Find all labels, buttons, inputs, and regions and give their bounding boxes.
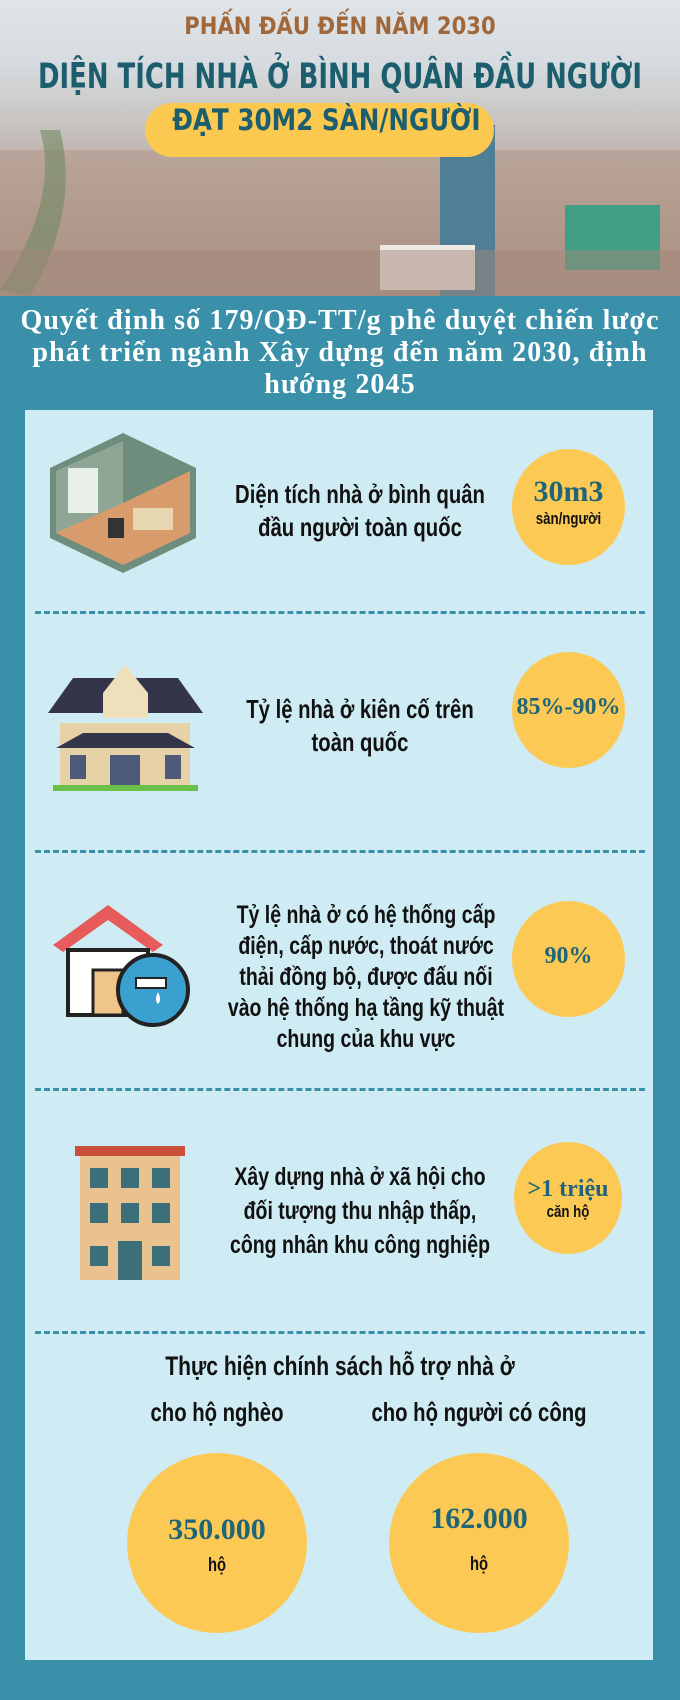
circle: 162.000: hộ [470, 1554, 488, 1575]
circle: 162.000 [389, 1453, 569, 1633]
city skyline [0, 125, 680, 296]
text: Diện tích nhà ở bình quân [235, 479, 485, 509]
row 2 [48, 665, 474, 791]
text: chung của khu vực [277, 1025, 455, 1053]
circle: 350.000: 350.000 [168, 1513, 266, 1546]
text: Tỷ lệ nhà ở có hệ thống cấp [237, 901, 495, 929]
subtitle band text: Quyết định số 179/QĐ-TT/g phê duyệt chiến lược [20, 305, 660, 336]
text [228, 901, 504, 1053]
circle: 90% [512, 901, 625, 1017]
main light panel [25, 410, 653, 1660]
circle: 90%: 90% [544, 943, 592, 969]
circle: >1 triệu: >1 triệu [528, 1176, 608, 1202]
yellow pill: ĐẠT 30M2 SÀN/NGƯỜI [172, 103, 481, 137]
circle: 350.000 [127, 1453, 307, 1633]
row 4 [75, 1146, 490, 1280]
title line 1: PHẤN ĐẤU ĐẾN NĂM 2030 [184, 12, 496, 40]
circle: 85-90: 85%-90% [516, 694, 620, 720]
circle: 30m3: 30m3 [534, 475, 604, 508]
yellow pill [145, 103, 494, 157]
icon: apartment building [75, 1146, 185, 1280]
text: đầu người toàn quốc [258, 512, 462, 542]
icon: house [48, 665, 203, 791]
subtitle band text [20, 305, 660, 400]
text [235, 479, 485, 542]
icon: room [50, 433, 196, 573]
text: điện, cấp nước, thoát nước [238, 932, 494, 960]
text: vào hệ thống hạ tầng kỹ thuật [228, 994, 504, 1022]
row 1 [50, 433, 485, 573]
text [246, 694, 474, 757]
text: toàn quốc [312, 727, 408, 757]
subheading left: cho hộ nghèo [151, 1397, 283, 1427]
circle: >1 triệu [514, 1142, 622, 1254]
subtitle band text: phát triển ngành Xây dựng đến năm 2030, định [32, 337, 648, 368]
icon: house with tap [53, 905, 190, 1027]
circle: 85-90 [512, 652, 625, 768]
text: công nhân khu công nghiệp [230, 1231, 490, 1259]
circle: 350.000: hộ [208, 1555, 226, 1576]
text: đối tượng thu nhập thấp, [244, 1197, 476, 1225]
bottom section heading: Thực hiện chính sách hỗ trợ nhà ở [165, 1351, 515, 1381]
subtitle band text: hướng 2045 [264, 369, 416, 400]
title line 2: DIỆN TÍCH NHÀ Ở BÌNH QUÂN ĐẦU NGƯỜI [38, 57, 642, 97]
text: thải đồng bộ, được đấu nối [239, 963, 493, 991]
text: Xây dựng nhà ở xã hội cho [234, 1163, 486, 1191]
text [230, 1163, 490, 1259]
text: Tỷ lệ nhà ở kiên cố trên [246, 694, 474, 724]
subheading right: cho hộ người có công [371, 1397, 586, 1427]
header photo background [0, 0, 680, 296]
row 3 [53, 901, 504, 1053]
circle: 30m3 [512, 449, 625, 565]
circle: 162.000: 162.000 [430, 1502, 528, 1535]
circle: 30m3: sàn/người [536, 509, 601, 528]
circle: >1 triệu: căn hộ [547, 1202, 589, 1221]
